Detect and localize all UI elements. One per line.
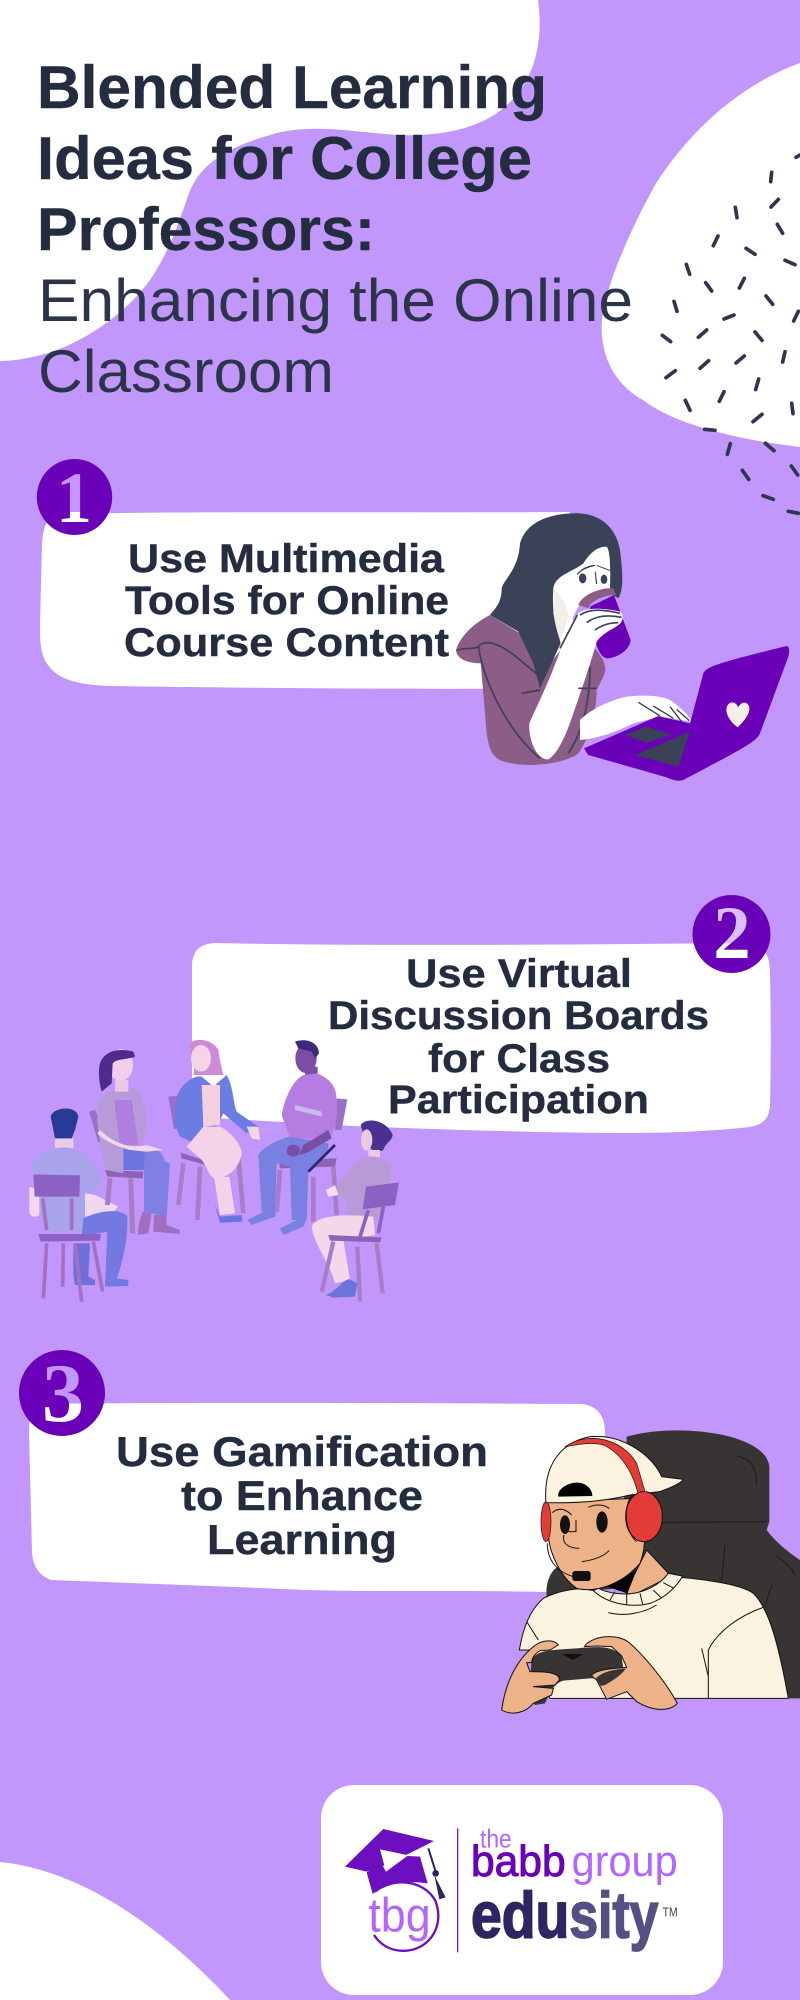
gaming chair (546, 1430, 800, 1698)
heading: tip 2: Discussion Boards (328, 994, 709, 1038)
blob: top left (0, 0, 540, 361)
number badge 1: 1 (56, 458, 92, 538)
person: woman in blazer (168, 1040, 260, 1223)
edusity: edu (471, 1879, 569, 1952)
collar (593, 1573, 683, 1605)
eyes (577, 565, 610, 584)
number badge 1 (37, 458, 112, 538)
heading: tip 1 (124, 537, 449, 665)
title: Classroom (38, 338, 334, 405)
heading: tip 1: Use Multimedia (128, 537, 445, 581)
microphone (547, 1543, 573, 1577)
heading: tip 3 (116, 1428, 488, 1563)
person: back right woman (312, 1121, 399, 1302)
title: Ideas for College (37, 125, 532, 192)
heading: tip 2: for Class (428, 1037, 610, 1081)
controller (531, 1647, 623, 1705)
number badge 3: 3 (42, 1347, 84, 1440)
left ear pad (541, 1502, 551, 1542)
divider (457, 1828, 458, 1952)
logo: the babb group edusity (345, 1823, 678, 1952)
typing arm (580, 696, 692, 740)
left hand (502, 1641, 559, 1713)
face (553, 547, 610, 642)
babb: babb (471, 1837, 566, 1886)
heading: tip 2: Participation (388, 1078, 649, 1122)
illustration: gamer with headset and controller (502, 1430, 800, 1713)
number badge 3 (19, 1347, 105, 1440)
neck shadow (553, 590, 568, 638)
cup rim (578, 588, 616, 608)
title: Professors: (37, 196, 375, 263)
tbg ring (374, 1882, 438, 1951)
head (547, 1498, 645, 1590)
graduation cap (345, 1829, 446, 1899)
shirt seams (457, 643, 597, 758)
title (37, 54, 633, 405)
sweater (519, 1577, 788, 1698)
trademark: TM (663, 1905, 678, 1920)
shirt (456, 615, 605, 765)
blob: bottom left (0, 1862, 230, 2000)
person: back left man (29, 1109, 128, 1302)
title: Blended Learning (37, 54, 547, 121)
hair (490, 513, 622, 688)
heart (726, 702, 749, 727)
illustration: discussion circle (29, 1040, 399, 1302)
panel: tip 2 card (192, 943, 771, 1133)
face features (560, 1515, 570, 1534)
drinking arm (529, 609, 623, 759)
heading: tip 1: Course Content (124, 621, 449, 665)
heading: tip 2: Use Virtual (406, 952, 632, 996)
cap strap hole (558, 1483, 592, 1497)
finger lines (560, 610, 622, 648)
panel: tip 3 card (29, 1403, 605, 1592)
blob: top right (602, 63, 800, 447)
panel: tip 1 card (40, 512, 575, 689)
cup (590, 595, 631, 658)
heading: tip 2 (328, 952, 709, 1122)
laptop (584, 646, 789, 781)
the: the (480, 1823, 512, 1853)
heading: tip 3: Learning (207, 1516, 397, 1563)
number badge 2: 2 (713, 892, 751, 975)
number badge 2 (692, 892, 770, 975)
person: man in hoodie (248, 1040, 347, 1235)
ear pad (626, 1492, 662, 1542)
neck (627, 1550, 668, 1594)
right hand (584, 1637, 677, 1709)
tbg letters: tbg (368, 1890, 431, 1943)
illustration: woman drinking at laptop (456, 513, 789, 781)
keyboard (625, 727, 672, 743)
edusity: sity (569, 1879, 658, 1952)
decorative dashes (662, 155, 800, 513)
trackpad (635, 732, 690, 767)
heading: tip 3: Use Gamification (116, 1428, 488, 1475)
headset band (565, 1438, 645, 1495)
heading: tip 1: Tools for Online (125, 579, 449, 623)
heading: tip 3: to Enhance (181, 1472, 423, 1519)
cap (546, 1436, 683, 1503)
title: Enhancing the Online (38, 267, 633, 334)
logo card (321, 1785, 723, 1995)
group: group (572, 1837, 678, 1886)
edusity (471, 1879, 658, 1952)
person: woman in cardigan (89, 1049, 180, 1235)
controller grip (596, 1668, 626, 1686)
